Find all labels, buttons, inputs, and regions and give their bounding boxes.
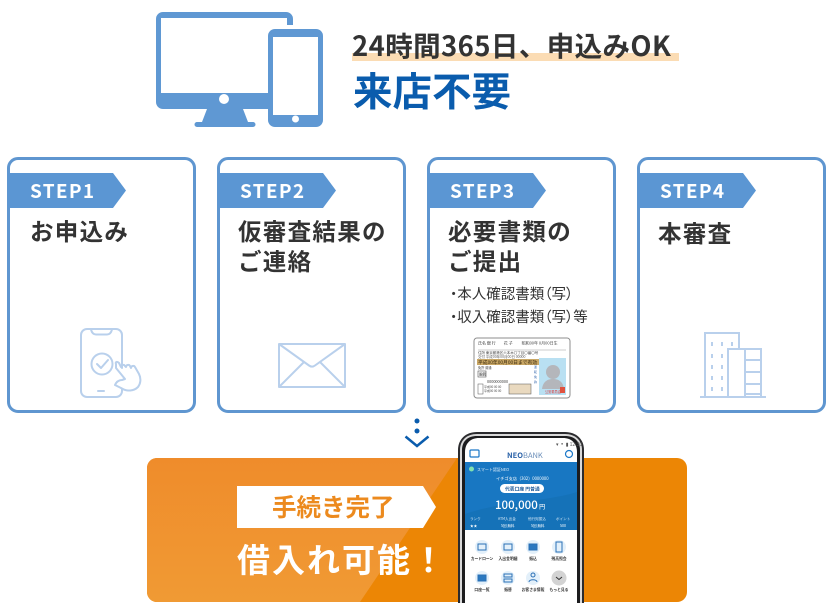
illustration: driver's licence: 交付 平成00年00月00日 00000 xyxy=(478,354,525,360)
step 2 ribbon xyxy=(218,173,336,208)
illustration: driver's licence: 眼鏡 xyxy=(479,372,486,378)
panel: step 1 xyxy=(7,157,196,413)
app menu labels: 残高照会 xyxy=(551,556,567,562)
step 1 title: お申込み xyxy=(30,213,129,247)
app menu labels: カードローン xyxy=(471,556,493,562)
illustration: smartphone with banking app: イチゴ支店（302）0000000 xyxy=(496,475,549,482)
app menu labels: 振込 xyxy=(529,556,537,562)
illustration: driver's licence: 平成00 00 00 xyxy=(484,384,502,389)
heading: no store visit needed: 来店不要 xyxy=(353,61,511,118)
step 2 title xyxy=(238,213,387,277)
phone status bar: ▾ ▪ ▮ 12:30 xyxy=(556,441,582,448)
panel: step 2 xyxy=(217,157,406,413)
heading: 24 hours 365 days: 24時間365日、申込みOK xyxy=(352,24,671,64)
app menu labels: お客さま情報 xyxy=(522,587,545,593)
step 4 ribbon: STEP4 xyxy=(660,177,725,204)
app balance header xyxy=(465,462,577,530)
panel: completion banner xyxy=(147,458,687,602)
step 3 document list: ・本人確認書類（写） xyxy=(450,283,573,304)
illustration: smartphone with banking app: ATM入出金 xyxy=(498,516,516,522)
illustration: smartphone with banking app: 100,000 円 xyxy=(495,497,545,513)
step 2 title: 仮審査結果の xyxy=(238,213,387,247)
illustration: driver's licence: 住所 東京都港区六本木〇丁目〇番〇号 xyxy=(478,350,539,356)
step 3 title: 必要書類の xyxy=(448,213,572,247)
step 2 title: ご連絡 xyxy=(238,243,312,277)
step 3 document list xyxy=(450,283,588,327)
illustration: driver's licence: 平成00 00 00 xyxy=(484,388,502,393)
app menu labels: 入出金明細 xyxy=(499,556,518,562)
illustration: smartphone with banking app: ★★ xyxy=(470,523,478,529)
illustration: smartphone with banking app: ランク xyxy=(470,516,481,522)
icon: envelope xyxy=(278,343,346,388)
step 1 ribbon: STEP1 xyxy=(30,177,95,204)
banner ribbon: procedure complete: 手続き完了 xyxy=(272,489,394,524)
step 3 title: ご提出 xyxy=(448,243,522,277)
app menu icons xyxy=(475,540,566,585)
panel: step 3 xyxy=(427,157,616,413)
illustration: smartphone with banking app xyxy=(458,432,584,603)
illustration: driver's licence xyxy=(474,338,570,398)
illustration: smartphone with banking app: 5回 無料 xyxy=(501,523,515,529)
step 3 document list: ・収入確認書類（写）等 xyxy=(450,306,588,327)
app menu labels: 振替 xyxy=(504,587,512,593)
heading: highlight underline xyxy=(352,53,679,61)
app menu labels xyxy=(471,556,569,593)
illustration: driver's licence: 0000000000 xyxy=(487,380,508,385)
step 1 ribbon xyxy=(8,173,126,208)
icon: office buildings xyxy=(700,332,766,398)
step 3 title xyxy=(448,213,572,277)
app menu labels: もっと見る xyxy=(550,587,569,593)
step 2 ribbon: STEP2 xyxy=(240,177,305,204)
banner ribbon: procedure complete xyxy=(237,486,436,528)
step 4 ribbon xyxy=(638,173,756,208)
icon: desktop monitor and smartphone xyxy=(156,12,323,127)
illustration: smartphone with banking app: 500 xyxy=(560,524,566,529)
illustration: driver's licence: 平成00年00月00日まで有効 xyxy=(478,359,537,366)
panel: step 4 xyxy=(637,157,826,413)
app menu labels: 口座一覧 xyxy=(474,587,490,593)
illustration: smartphone with banking app: ポイント xyxy=(556,516,571,522)
app logo: NEOBANK xyxy=(507,450,543,461)
icon: down arrow xyxy=(404,418,430,448)
banner text: borrowing available: 借入れ可能！ xyxy=(237,534,447,582)
step 3 ribbon: STEP3 xyxy=(450,177,515,204)
step 4 title: 本審査 xyxy=(658,215,732,249)
illustration: driver's licence: 公安委員会 xyxy=(545,389,562,394)
step 3 ribbon xyxy=(428,173,546,208)
illustration: smartphone with banking app: 他行宛振込 xyxy=(528,516,546,522)
illustration: driver's licence: 転 xyxy=(534,370,537,374)
illustration: driver's licence: 免 xyxy=(534,374,537,379)
illustration: driver's licence: 免許 普通 xyxy=(478,365,492,370)
illustration: smartphone with banking app: 代表口座 円普通 xyxy=(505,486,540,492)
illustration: smartphone with banking app: 5回 無料 xyxy=(531,523,545,529)
illustration: driver's licence: 運 xyxy=(534,364,537,369)
illustration: smartphone with banking app: スマート認証NEO xyxy=(477,466,509,473)
icon: phone with tapping hand xyxy=(80,328,142,398)
illustration: driver's licence: 許 xyxy=(534,379,537,384)
illustration: driver's licence: 氏名 銀 行 花 子 昭和00年 0月00日生 xyxy=(478,340,558,346)
